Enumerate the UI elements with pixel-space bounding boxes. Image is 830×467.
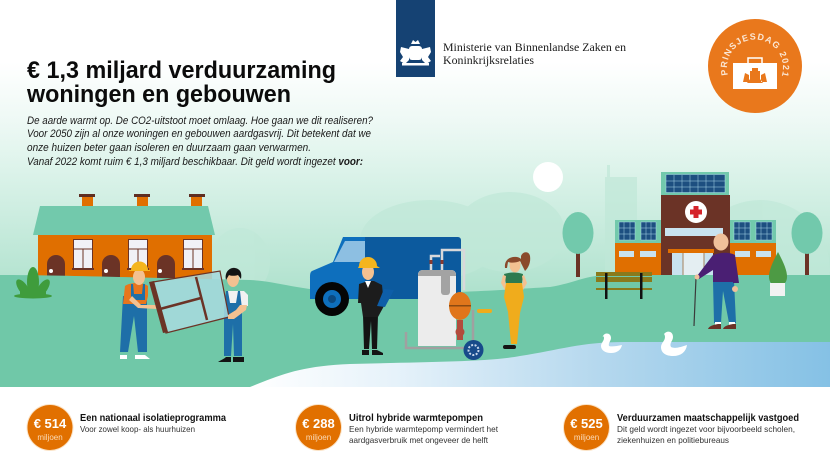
shoes bbox=[218, 357, 244, 362]
amount circle bbox=[563, 404, 610, 451]
head bbox=[362, 264, 374, 280]
boiler with heat pump bbox=[406, 250, 492, 360]
title: € 1,3 miljard verduurzaming bbox=[27, 57, 336, 84]
ground hills bbox=[0, 275, 830, 390]
red pump bbox=[456, 320, 464, 340]
central tower bbox=[661, 195, 730, 275]
tree left bbox=[562, 212, 594, 277]
overall bib bbox=[131, 284, 145, 300]
hand on frame bbox=[228, 305, 247, 319]
woman in yellow overalls bbox=[501, 252, 530, 349]
head bbox=[714, 234, 728, 250]
hand right bbox=[732, 286, 738, 292]
ministry name bbox=[443, 40, 626, 67]
dolly frame bbox=[406, 310, 473, 348]
chimneys bbox=[79, 194, 205, 207]
description bbox=[349, 424, 499, 445]
title: woningen en gebouwen bbox=[26, 81, 291, 108]
entrance bbox=[668, 249, 714, 275]
head bbox=[133, 269, 145, 285]
amount circle bbox=[26, 404, 74, 451]
item: isolatieprogramma bbox=[26, 404, 226, 451]
green top bbox=[504, 272, 523, 284]
socks bbox=[715, 322, 735, 325]
panel: hospital building bbox=[615, 172, 776, 275]
hospital window band bbox=[665, 228, 723, 236]
legs bbox=[713, 281, 736, 323]
roof bbox=[33, 206, 215, 235]
amount circle: € 288 bbox=[302, 416, 335, 431]
description: Voor zowel koop- als huurhuizen bbox=[80, 424, 195, 434]
amount circle: € 514 bbox=[34, 416, 67, 431]
valves bbox=[431, 260, 442, 264]
intro text: Voor 2050 zijn al onze woningen en gebouwen aardgasvrij. Dit betekent dat we bbox=[27, 128, 371, 140]
red cross emblem bbox=[685, 201, 707, 223]
hair bbox=[226, 268, 241, 280]
description: Een hybride warmtepomp vermindert het bbox=[349, 424, 499, 434]
orange shirt bbox=[123, 283, 148, 304]
window frame carried bbox=[149, 271, 247, 333]
trousers bbox=[363, 315, 378, 349]
intro text bbox=[27, 115, 374, 168]
background sky gradient bbox=[0, 0, 830, 310]
yellow overalls bbox=[504, 283, 524, 344]
boiler top bbox=[418, 270, 456, 276]
cab window bbox=[334, 241, 365, 262]
description: Dit geld wordt ingezet voor bijvoorbeeld scholen, bbox=[617, 424, 795, 434]
faded background city and hills bbox=[210, 165, 830, 340]
house wall bbox=[38, 235, 212, 287]
house windows bbox=[72, 240, 204, 269]
boiler tank bbox=[418, 270, 456, 346]
badge text: PRINSJESDAG 2021 bbox=[720, 33, 790, 76]
cab bbox=[310, 237, 365, 299]
cane bbox=[694, 278, 696, 326]
logo bar: Rijksoverheid bbox=[396, 0, 435, 77]
shirt bbox=[226, 291, 248, 306]
house doors bbox=[47, 255, 175, 286]
bottom white band bbox=[0, 387, 830, 467]
arm bbox=[129, 296, 157, 309]
legs bbox=[120, 296, 147, 352]
potted plant bbox=[769, 252, 787, 296]
sweater bbox=[697, 253, 739, 283]
cargo body bbox=[343, 237, 461, 299]
arms bbox=[501, 275, 527, 290]
wheel bbox=[315, 282, 349, 316]
hand bbox=[694, 274, 700, 280]
shoes bbox=[708, 324, 736, 329]
description bbox=[617, 424, 795, 445]
tree right bbox=[792, 212, 822, 277]
ministry name: Ministerie van Binnenlandse Zaken en bbox=[443, 40, 626, 54]
overalls bbox=[224, 291, 242, 356]
amount circle: miljoen bbox=[306, 433, 331, 442]
amount circle: miljoen bbox=[574, 433, 599, 442]
shoes bbox=[503, 345, 516, 349]
solar panels bbox=[666, 174, 725, 193]
shirt and tie bbox=[365, 281, 371, 288]
head bbox=[510, 258, 520, 272]
suit jacket bbox=[358, 281, 384, 317]
intro text: De aarde warmt op. De CO2-uitstoot moet omlaag. Hoe gaan we dit realiseren? bbox=[27, 115, 374, 127]
yellow handle bbox=[477, 309, 492, 313]
pipe bracket bbox=[441, 270, 450, 295]
worker with hard hat bbox=[120, 262, 157, 359]
hard hat bbox=[358, 257, 380, 268]
bush bbox=[14, 267, 52, 299]
hard hat bbox=[129, 262, 150, 271]
dolly wheel bbox=[464, 340, 484, 360]
clipboard bbox=[377, 289, 394, 307]
title bbox=[26, 57, 336, 108]
hair bbox=[505, 257, 523, 268]
solar roof bbox=[661, 172, 729, 196]
intro text: onze huizen beter gaan isoleren en duurzaam gaan verwarmen. bbox=[27, 142, 311, 154]
water pond bbox=[250, 342, 830, 387]
panel: house row bbox=[33, 194, 215, 287]
heading: Uitrol hybride warmtepompen bbox=[349, 412, 483, 424]
ministry name: Koninkrijksrelaties bbox=[443, 53, 534, 67]
bench bbox=[596, 272, 652, 299]
intro text: Vanaf 2022 komt ruim € 1,3 miljard beschikbaar. Dit geld wordt ingezet voor: bbox=[27, 156, 363, 168]
head bbox=[227, 271, 239, 287]
worker with overalls bbox=[218, 268, 248, 362]
pipes bbox=[431, 250, 464, 290]
shoes bbox=[362, 350, 383, 355]
heading: Verduurzamen maatschappelijk vastgoed bbox=[617, 412, 799, 424]
item: hybride warmtepompen bbox=[295, 404, 499, 451]
item: maatschappelijk vastgoed bbox=[563, 404, 799, 451]
inspector with clipboard bbox=[358, 257, 394, 355]
swan left bbox=[601, 334, 622, 353]
ponytail bbox=[521, 252, 530, 271]
swan right bbox=[661, 332, 687, 356]
description: ziekenhuizen en politiebureaus bbox=[617, 435, 729, 445]
badge: Prinsjesdag 2021 bbox=[708, 19, 802, 113]
amount circle: miljoen bbox=[37, 433, 63, 442]
description: aardgasverbruik met ongeveer de helft bbox=[349, 435, 489, 445]
amount circle bbox=[295, 404, 342, 451]
delivery van bbox=[310, 237, 461, 316]
coat of arms emblem bbox=[400, 40, 431, 66]
orange expansion vessel bbox=[449, 292, 471, 320]
shoes bbox=[120, 355, 150, 359]
elderly man with cane bbox=[694, 234, 739, 329]
amount circle: € 525 bbox=[570, 416, 603, 431]
suitcase icon bbox=[733, 58, 777, 89]
wings bbox=[615, 220, 776, 275]
heading: Een nationaal isolatieprogramma bbox=[80, 412, 226, 424]
sun bbox=[533, 162, 563, 192]
